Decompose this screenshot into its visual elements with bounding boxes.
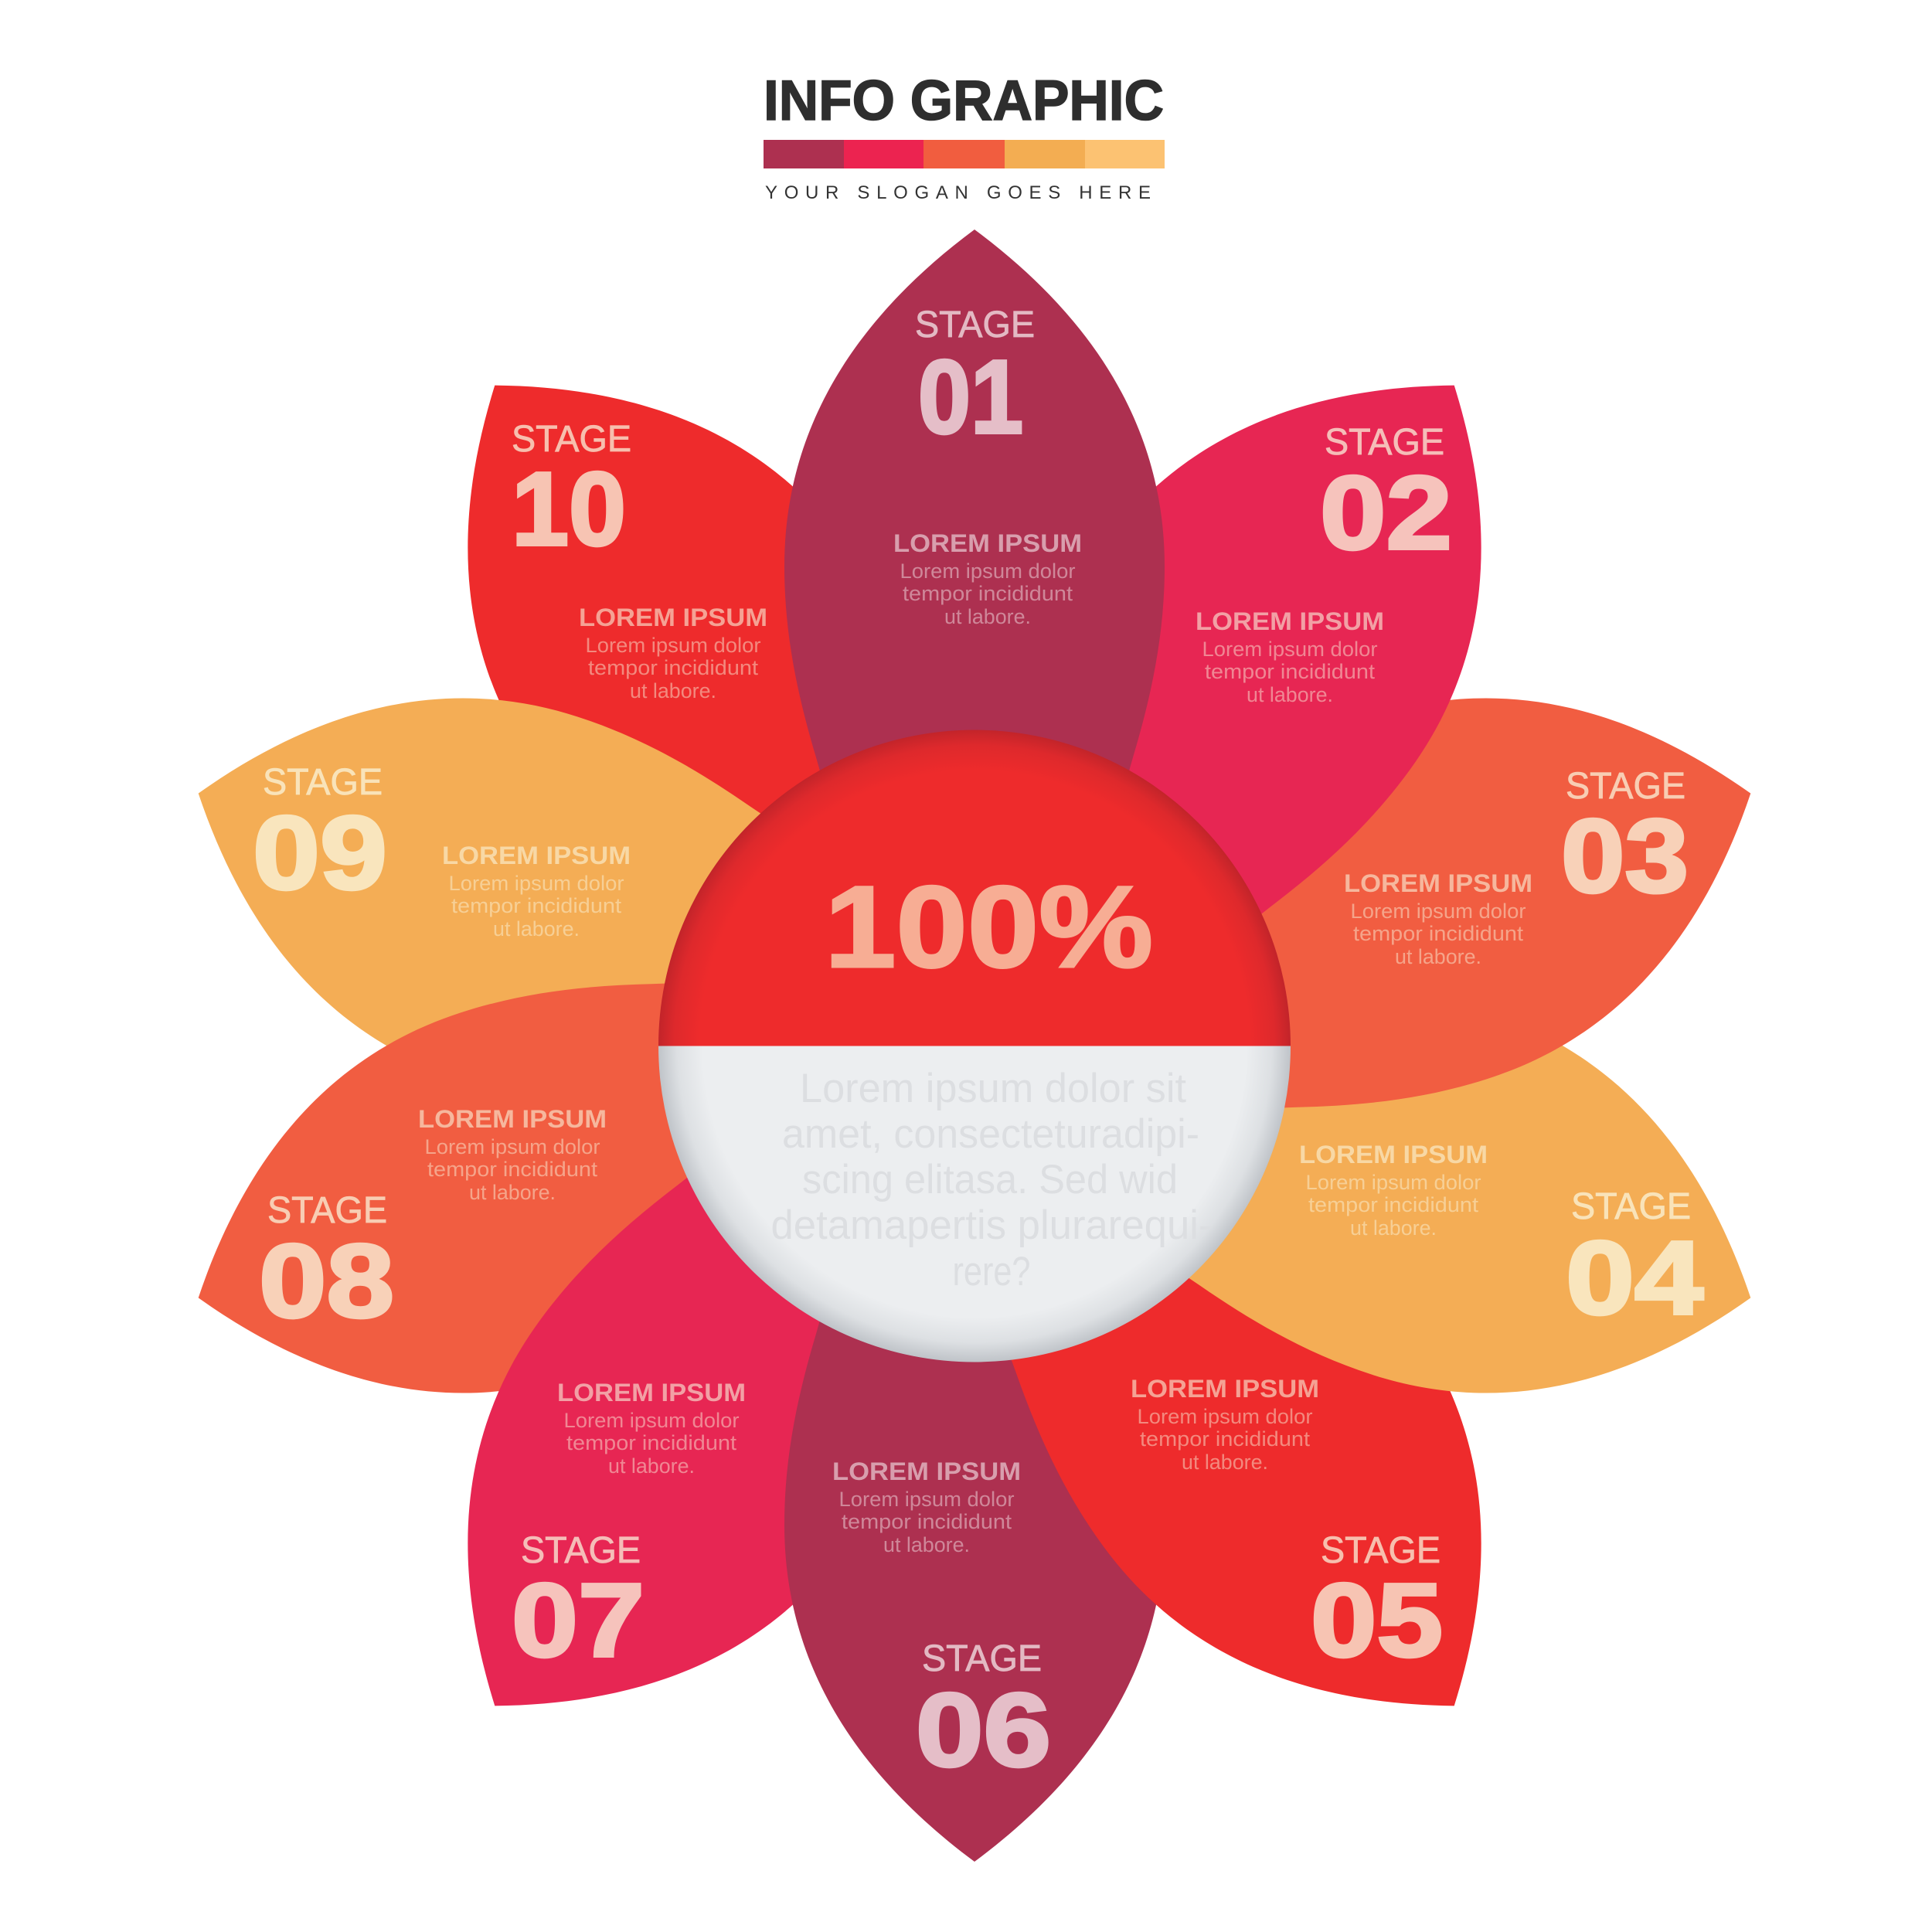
panel: stage 03: LOREM IPSUM bbox=[1344, 869, 1532, 897]
panel: stage 05: LOREM IPSUM bbox=[1131, 1375, 1319, 1403]
centre circle bbox=[658, 730, 1291, 1362]
panel: stage 01: 01 bbox=[918, 338, 1023, 455]
panel: stage 07: LOREM IPSUM bbox=[557, 1379, 746, 1406]
panel: stage 04: LOREM IPSUM bbox=[1299, 1141, 1488, 1168]
panel: stage 02 bbox=[934, 274, 1608, 1001]
panel: stage 06: ut labore. bbox=[883, 1533, 970, 1556]
panel: stage 04: 04 bbox=[1566, 1219, 1703, 1336]
colour bar bbox=[764, 140, 1165, 168]
panel: stage 10: STAGE bbox=[512, 419, 631, 460]
panel: stage 10: 10 bbox=[512, 451, 626, 567]
panel: stage 08: tempor incididunt bbox=[427, 1158, 598, 1181]
panel: stage 05: tempor incididunt bbox=[1140, 1427, 1311, 1451]
panel: stage 02: STAGE bbox=[1325, 422, 1444, 463]
panel: stage 05: ut labore. bbox=[1182, 1451, 1268, 1474]
panel: stage 07: ut labore. bbox=[608, 1454, 695, 1478]
panel: stage 03: tempor incididunt bbox=[1353, 922, 1524, 945]
panel: stage 02: Lorem ipsum dolor bbox=[1202, 638, 1378, 661]
centre description: detamapertis plurarequi- bbox=[771, 1202, 1212, 1248]
panel: stage 09 bbox=[140, 613, 849, 1167]
panel: stage 04: ut labore. bbox=[1350, 1216, 1437, 1240]
panel: stage 01: Lorem ipsum dolor bbox=[900, 560, 1076, 583]
panel: stage 08: STAGE bbox=[267, 1190, 387, 1231]
panel: stage 04: STAGE bbox=[1571, 1186, 1691, 1227]
centre description: rere? bbox=[952, 1249, 1031, 1294]
panel: stage 08: Lorem ipsum dolor bbox=[425, 1135, 600, 1158]
panel: stage 09: Lorem ipsum dolor bbox=[448, 872, 624, 895]
panel: stage 03: Lorem ipsum dolor bbox=[1351, 900, 1526, 923]
panel: stage 07: 07 bbox=[512, 1562, 645, 1679]
panel: stage 04: tempor incididunt bbox=[1308, 1193, 1479, 1216]
panel: stage 01 bbox=[784, 230, 1165, 852]
panel: stage 02: 02 bbox=[1320, 454, 1452, 571]
panel: stage 10: LOREM IPSUM bbox=[579, 604, 767, 631]
panel: stage 08 bbox=[140, 924, 849, 1478]
panel: stage 01: LOREM IPSUM bbox=[893, 529, 1082, 557]
panel: stage 06: 06 bbox=[916, 1672, 1051, 1788]
centre description bbox=[771, 1066, 1212, 1294]
panel: stage 01: STAGE bbox=[915, 304, 1035, 345]
panel: stage 09: LOREM IPSUM bbox=[442, 842, 631, 869]
panel: stage 06: LOREM IPSUM bbox=[832, 1458, 1021, 1485]
panel: stage 08: ut labore. bbox=[469, 1181, 556, 1204]
panel: stage 03: STAGE bbox=[1566, 766, 1685, 807]
panel: stage 10: tempor incididunt bbox=[588, 656, 759, 679]
centre description: scing elitasa. Sed wid bbox=[802, 1157, 1178, 1202]
panel: stage 03: ut labore. bbox=[1395, 945, 1481, 968]
panel: stage 06: Lorem ipsum dolor bbox=[839, 1488, 1015, 1511]
panel: stage 02: LOREM IPSUM bbox=[1196, 607, 1384, 635]
panel: stage 09: tempor incididunt bbox=[451, 894, 622, 917]
panel: stage 03: 03 bbox=[1561, 798, 1689, 914]
panel: stage 08: 08 bbox=[259, 1223, 394, 1339]
centre description: amet, consecteturadipi- bbox=[782, 1111, 1199, 1157]
panel: stage 03 bbox=[1100, 613, 1809, 1167]
panel: stage 07 bbox=[341, 1090, 1015, 1818]
slogan: YOUR SLOGAN GOES HERE bbox=[765, 182, 1151, 203]
panel: stage 05: STAGE bbox=[1321, 1530, 1440, 1571]
panel: stage 06 bbox=[784, 1239, 1165, 1862]
panel: stage 05: Lorem ipsum dolor bbox=[1138, 1405, 1313, 1428]
panel: stage 09: STAGE bbox=[263, 762, 383, 803]
panel: stage 04 bbox=[1100, 924, 1809, 1478]
panel: stage 07: STAGE bbox=[521, 1530, 641, 1571]
panel: stage 04: Lorem ipsum dolor bbox=[1306, 1171, 1481, 1194]
panel: stage 09: 09 bbox=[253, 794, 387, 911]
panel: stage 05 bbox=[934, 1090, 1608, 1818]
panel: stage 06: tempor incididunt bbox=[842, 1510, 1012, 1533]
panel: stage 07: tempor incididunt bbox=[566, 1431, 737, 1454]
panel: stage 06: STAGE bbox=[922, 1638, 1042, 1679]
panel: stage 08: LOREM IPSUM bbox=[418, 1105, 607, 1133]
centre description: Lorem ipsum dolor sit bbox=[800, 1066, 1186, 1111]
percentage: 100% bbox=[825, 862, 1153, 992]
panel: stage 05: 05 bbox=[1311, 1562, 1443, 1679]
panel: stage 10: ut labore. bbox=[630, 679, 716, 702]
panel: stage 10 bbox=[341, 274, 1015, 1001]
panel: stage 09: ut labore. bbox=[493, 917, 580, 940]
panel: stage 01: ut labore. bbox=[944, 605, 1031, 628]
panel: stage 02: tempor incididunt bbox=[1205, 660, 1376, 683]
panel: stage 02: ut labore. bbox=[1247, 683, 1333, 706]
panel: stage 07: Lorem ipsum dolor bbox=[564, 1409, 740, 1432]
title: INFO GRAPHIC bbox=[764, 70, 1164, 132]
panel: stage 10: Lorem ipsum dolor bbox=[586, 634, 761, 657]
panel: stage 01: tempor incididunt bbox=[903, 582, 1073, 605]
